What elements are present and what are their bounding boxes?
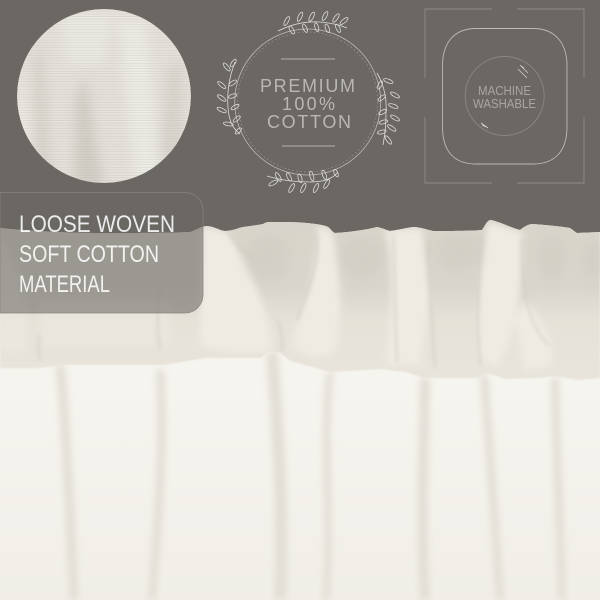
callout text: SOFT COTTON bbox=[19, 241, 159, 268]
callout text: MATERIAL bbox=[19, 271, 110, 298]
inner circle bbox=[465, 56, 544, 136]
laurel branch: left bbox=[216, 58, 242, 135]
heading sheer shaded areas bbox=[600, 252, 601, 264]
curtain vertical folds bbox=[60, 352, 562, 600]
heading gathered pleats bbox=[200, 222, 548, 364]
badge text: COTTON bbox=[267, 112, 351, 132]
badge text bbox=[260, 76, 355, 132]
badge text: 100% bbox=[282, 94, 335, 114]
curtain lower panel bbox=[0, 220, 600, 600]
wreath circle bbox=[235, 29, 381, 175]
laurel branch: bottom bbox=[267, 169, 339, 193]
callout text bbox=[19, 211, 175, 298]
curtain photo bbox=[0, 220, 600, 600]
badge: machine washable bbox=[425, 9, 584, 183]
fabric close-up circle bbox=[16, 9, 191, 190]
outer bracket frame bbox=[425, 9, 584, 183]
badge: premium 100% cotton bbox=[216, 11, 400, 193]
washable text bbox=[473, 84, 536, 111]
callout text: LOOSE WOVEN bbox=[19, 211, 175, 238]
laurel branch: right bbox=[376, 73, 400, 145]
laurel branch: top bbox=[278, 11, 349, 35]
wreath dotted ring bbox=[238, 32, 378, 172]
curtain rod pocket heading bbox=[0, 220, 600, 380]
badge text: PREMIUM bbox=[260, 76, 355, 96]
close-up folds bbox=[16, 15, 182, 190]
panel: text callout bbox=[0, 192, 203, 313]
washable text: WASHABLE bbox=[473, 97, 536, 111]
close-up weave texture bbox=[17, 9, 191, 183]
rounded square bbox=[442, 28, 567, 164]
shine marks bbox=[481, 65, 528, 128]
callout backing bbox=[0, 192, 203, 313]
heading crease shadows bbox=[38, 232, 548, 368]
washable text: MACHINE bbox=[478, 84, 531, 98]
badge rules bbox=[281, 59, 335, 146]
